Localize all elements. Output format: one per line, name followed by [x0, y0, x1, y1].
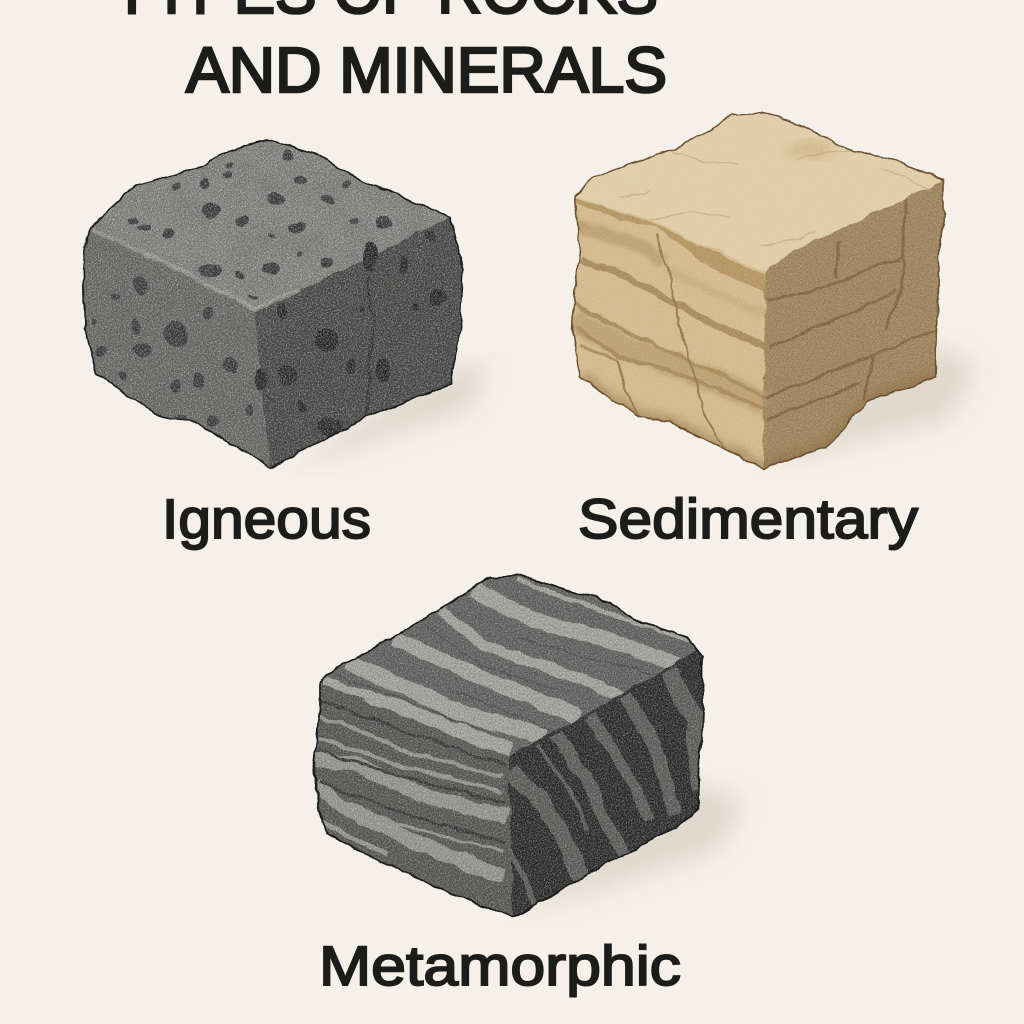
- grain texture: [314, 575, 704, 916]
- top face bands: [321, 575, 698, 757]
- fracture: [367, 277, 373, 417]
- top face highlight edge: [92, 229, 300, 310]
- grain texture: [84, 141, 462, 468]
- left face strata lines: [573, 260, 767, 410]
- top face: [90, 140, 450, 310]
- rock shadow: sedimentary: [770, 340, 978, 466]
- right face: [255, 217, 463, 468]
- rock outline: [313, 575, 702, 918]
- label: sedimentary: Sedimentary: [578, 487, 918, 550]
- mottled shading: [96, 184, 433, 422]
- left face upper strata band: [575, 198, 765, 292]
- grain texture: [573, 114, 944, 467]
- left face bands: [314, 684, 514, 916]
- left face soft strata: [574, 225, 767, 403]
- rock shadow: igneous: [290, 362, 490, 466]
- rock outline: [83, 140, 463, 468]
- right face bands: [507, 649, 704, 916]
- label: metamorphic: Metamorphic: [319, 934, 681, 997]
- title: AND MINERALS: [186, 34, 667, 106]
- top face: [575, 113, 943, 273]
- dark grain on right face: [760, 170, 950, 475]
- label: igneous: Igneous: [162, 487, 371, 550]
- edge shading: [580, 377, 935, 468]
- left face cracks: [617, 233, 727, 450]
- panel: metamorphic rock: [300, 560, 745, 930]
- dark grain texture: [84, 141, 462, 467]
- illustration: metamorphic rock block: [312, 573, 705, 918]
- dark grain texture: [315, 576, 703, 914]
- right face strata: [767, 200, 937, 420]
- illustration: igneous rock block: [82, 138, 464, 470]
- top face warm smudge: [785, 141, 835, 159]
- top face markings: [620, 150, 930, 245]
- vesicles: [90, 151, 393, 426]
- panel: sedimentary rock: [560, 100, 978, 480]
- right face: [763, 180, 943, 468]
- title: [113, 0, 667, 106]
- rock outline: [573, 113, 943, 468]
- illustration: sedimentary rock block: [570, 112, 946, 470]
- rock shadow: metamorphic: [520, 780, 745, 915]
- panel: igneous rock: [70, 130, 490, 480]
